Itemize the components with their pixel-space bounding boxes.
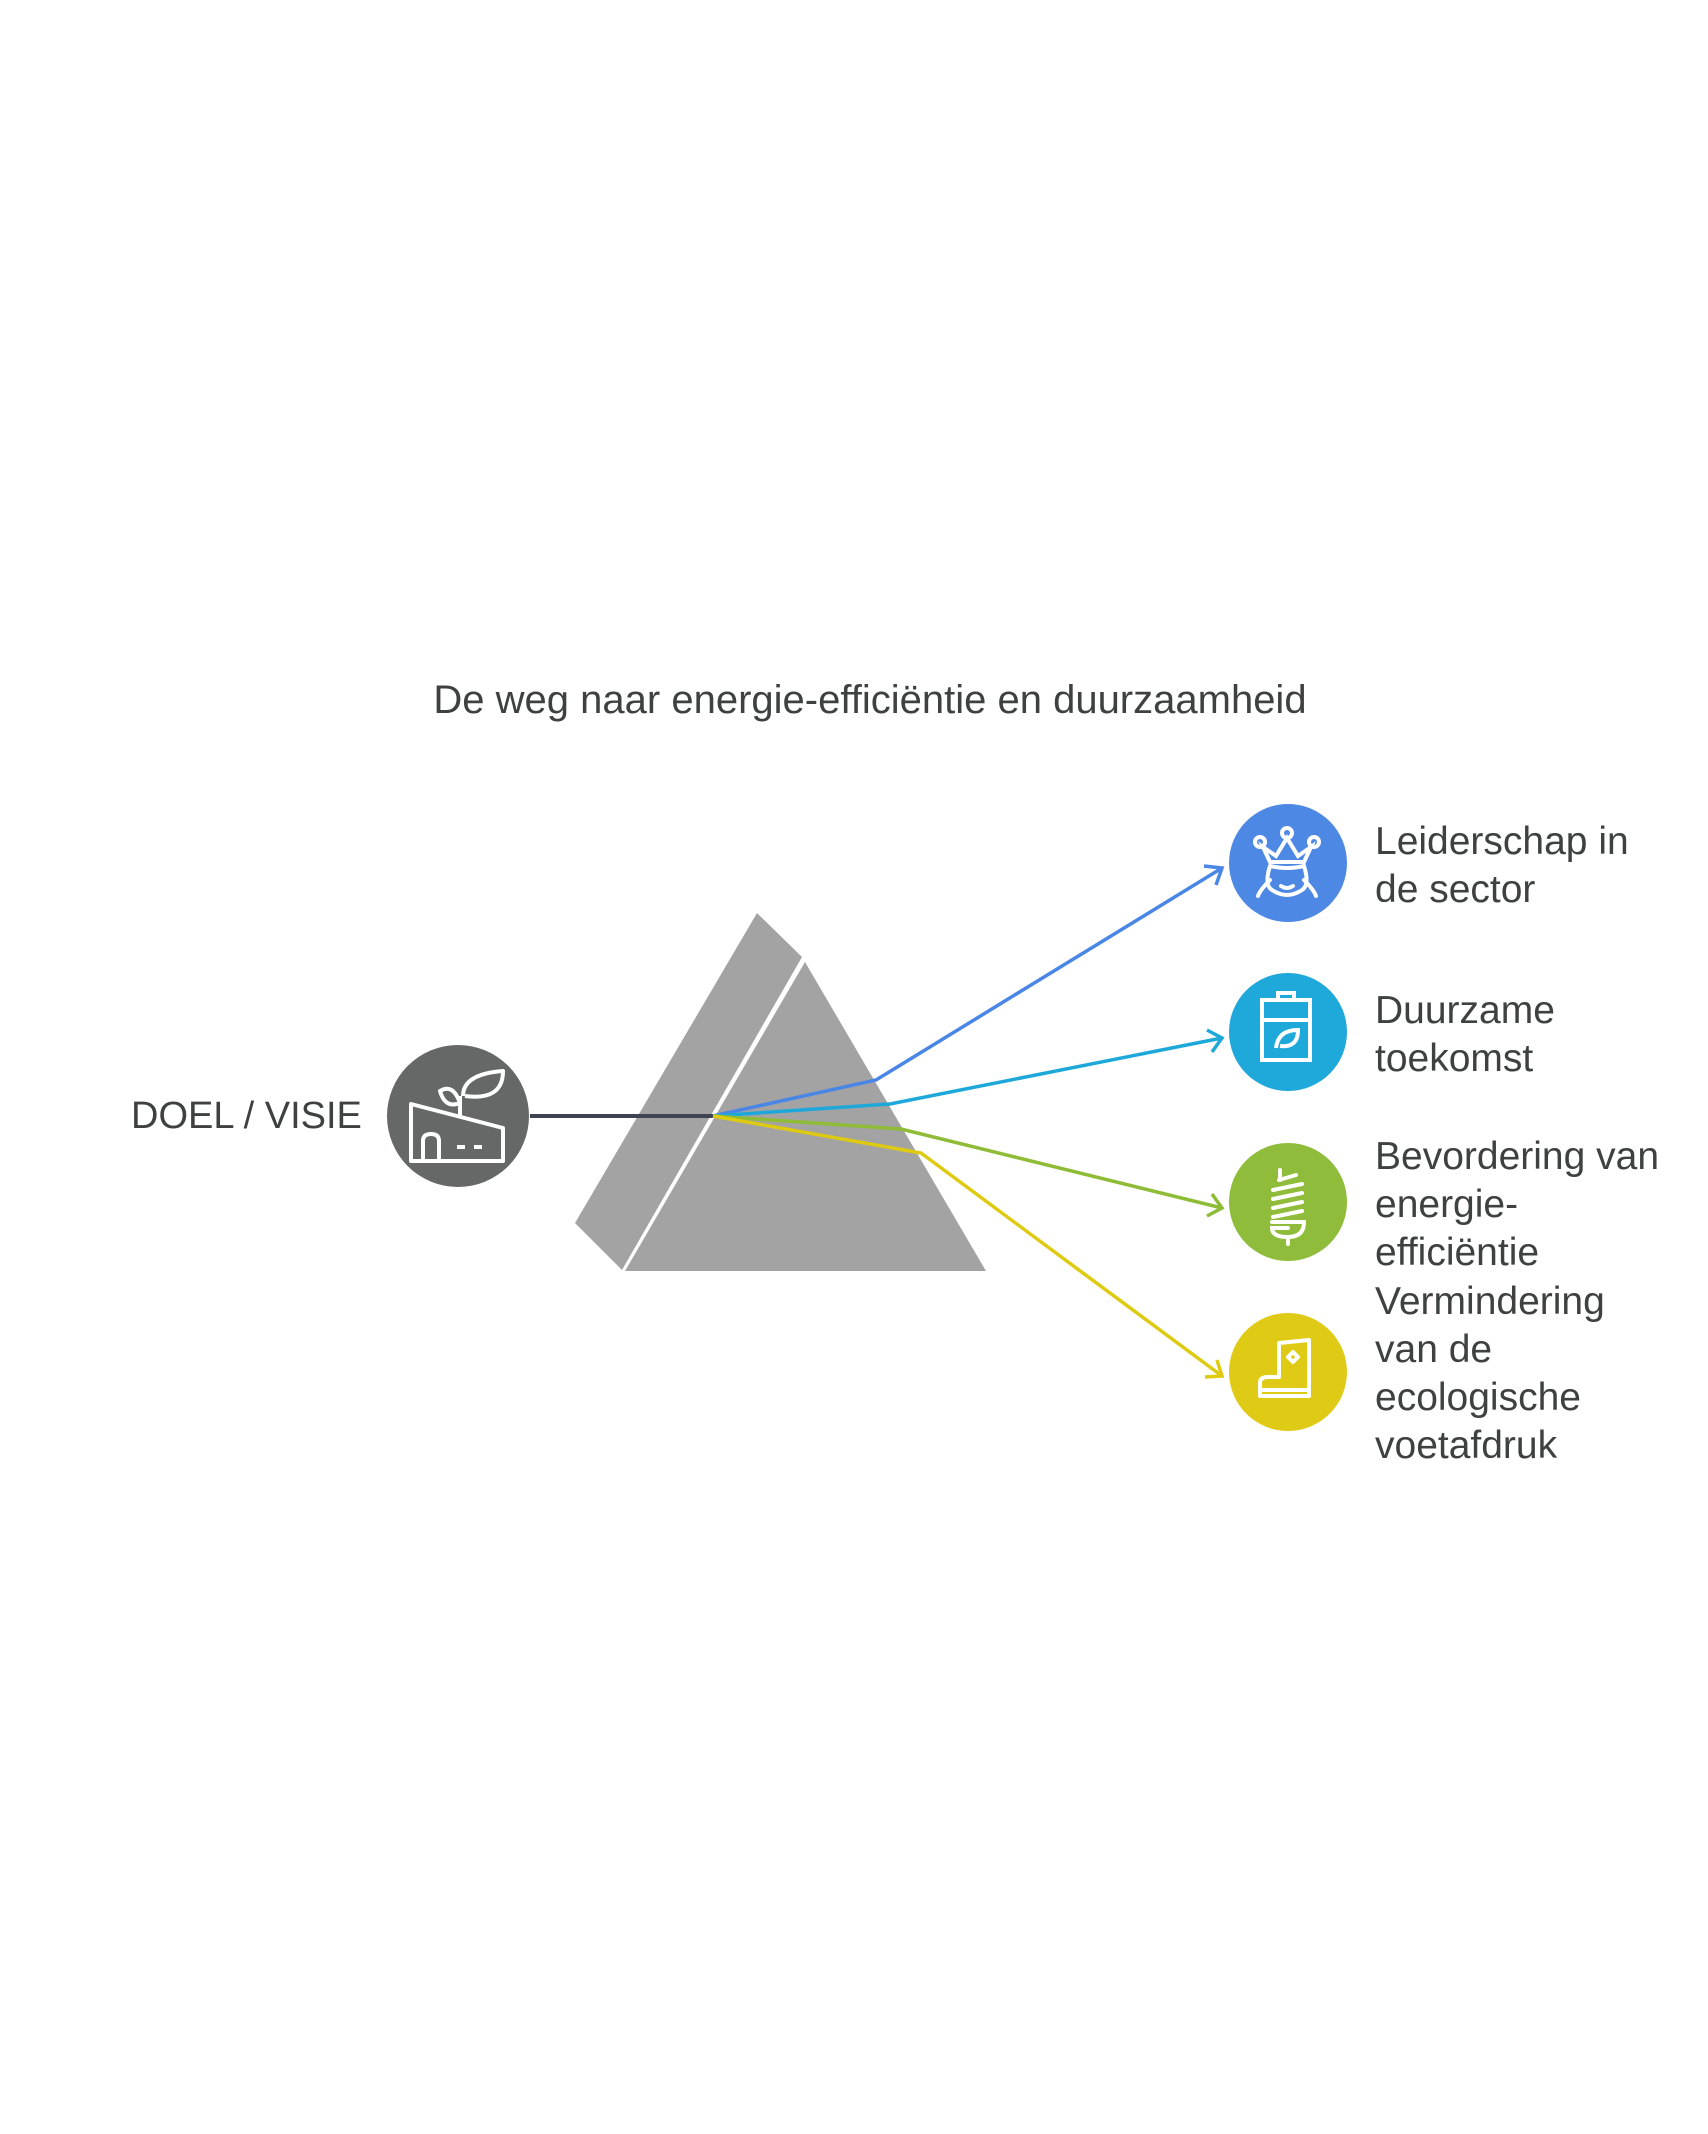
text: energy efficiency: energie-	[1375, 1183, 1518, 1226]
label: doel / visie: DOEL / VISIE	[131, 1095, 362, 1137]
text: ecological footprint: ecologische	[1375, 1376, 1581, 1419]
text: energy efficiency: efficiëntie	[1375, 1231, 1539, 1274]
text: ecological footprint: Vermindering	[1375, 1280, 1605, 1323]
text: leadership	[1375, 820, 1629, 911]
icon: crown (leadership)	[1229, 804, 1347, 922]
text: leadership: de sector	[1375, 868, 1535, 911]
input line	[530, 1114, 713, 1118]
ray: yellow	[713, 1116, 1222, 1377]
text: ecological footprint: voetafdruk	[1375, 1424, 1557, 1467]
text: energy efficiency	[1375, 1135, 1659, 1274]
icon: boot	[1229, 1313, 1347, 1431]
text: ecological footprint	[1375, 1280, 1605, 1467]
ray: green	[713, 1116, 1222, 1216]
ray: blue	[713, 866, 1222, 1116]
text: sustainable future: toekomst	[1375, 1037, 1533, 1080]
ray: cyan	[713, 1030, 1222, 1116]
prism	[575, 913, 986, 1271]
text: sustainable future	[1375, 989, 1555, 1080]
icon: battery leaf	[1229, 973, 1347, 1091]
text: sustainable future: Duurzame	[1375, 989, 1555, 1032]
text: energy efficiency: Bevordering van	[1375, 1135, 1659, 1178]
text: leadership: Leiderschap in	[1375, 820, 1629, 863]
title: De weg naar energie-efficiëntie en duurzaamheid	[433, 678, 1307, 722]
icon: energy saving bulb	[1229, 1143, 1347, 1261]
icon: factory with plant	[387, 1045, 529, 1187]
text: ecological footprint: van de	[1375, 1328, 1492, 1371]
